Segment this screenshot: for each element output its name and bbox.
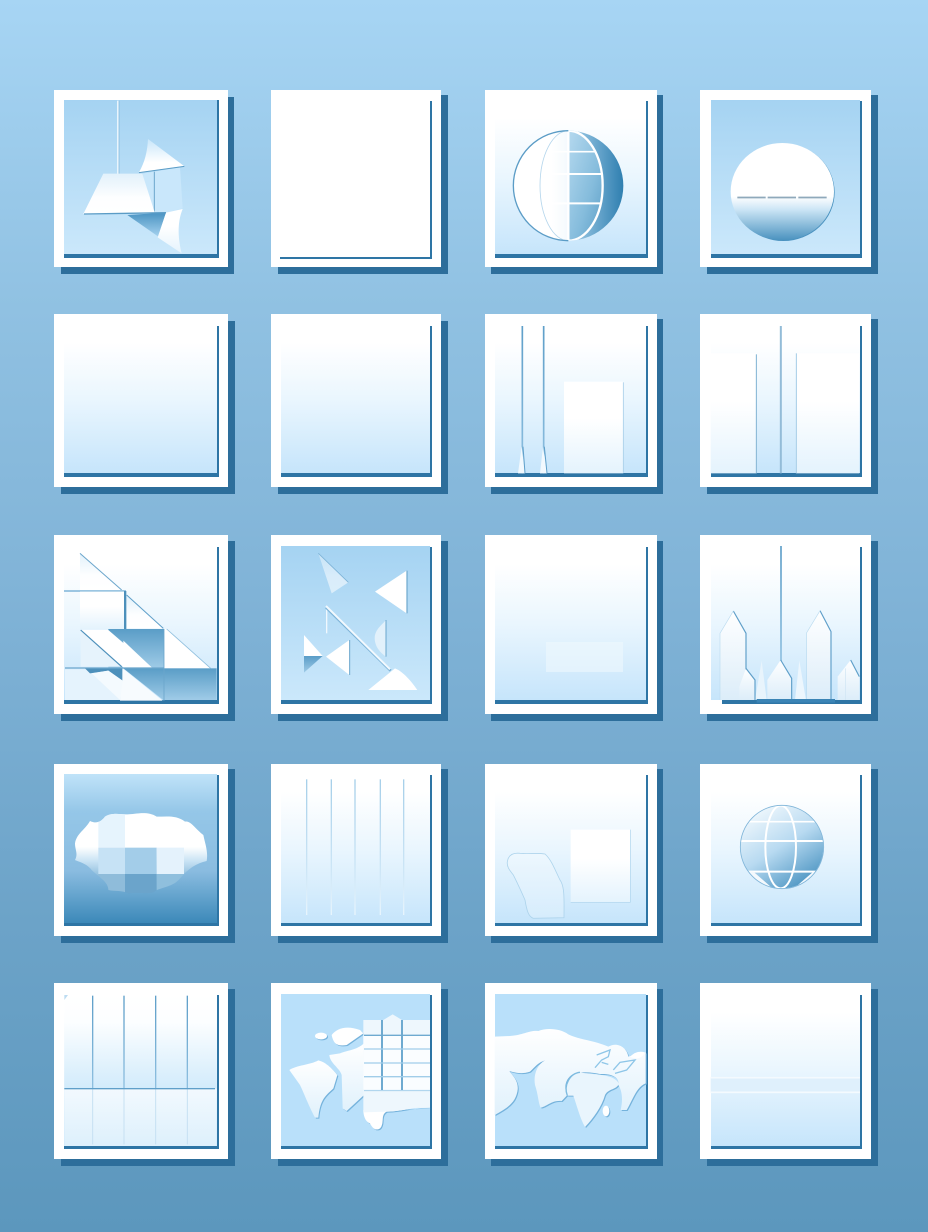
panel: row 2 card 2, blank xyxy=(271,314,448,494)
panel: row 1 card 1, hanging shapes xyxy=(54,90,234,274)
icon: map continents xyxy=(289,1028,430,1129)
panel: row 3 card 4, pointed towers xyxy=(700,535,878,721)
icon: horizontal band with white rules xyxy=(711,1078,860,1093)
icon: globe with crescent shadow xyxy=(513,130,623,241)
panel: row 5 card 4, horizontal band xyxy=(700,983,878,1166)
panel: row 4 card 4, small globe xyxy=(700,764,878,943)
panel: row 4 card 3, blob and rectangle xyxy=(485,764,663,943)
icon: five vertical lines xyxy=(306,779,404,915)
panel: row 3 card 1, stepped triangles xyxy=(54,535,235,721)
icon: sphere with dashed line xyxy=(731,143,835,241)
icon: cloud-shaped patchwork xyxy=(75,812,207,894)
panel: row 2 card 1, blank xyxy=(54,314,235,494)
panel: row 3 card 2, scattered triangles xyxy=(271,535,448,721)
icon: scattered triangles and diagonal xyxy=(304,553,417,690)
panel: row 5 card 3, world map xyxy=(485,983,663,1166)
panel: row 1 card 3, shaded globe xyxy=(485,90,663,274)
icon: map grid panel xyxy=(363,1014,430,1112)
icon: spires and white rectangle xyxy=(518,326,623,473)
icon: small globe xyxy=(740,805,824,889)
panel: row 4 card 1, cloud map xyxy=(54,764,235,943)
panel: row 5 card 1, grid lines xyxy=(54,983,235,1166)
icon: map landmass xyxy=(495,1029,646,1127)
icon: faint rectangle xyxy=(546,642,623,672)
panel: row 3 card 3, faint rectangle xyxy=(485,535,663,721)
panel: row 1 card 2, blank xyxy=(271,90,448,274)
icon: stepped triangles xyxy=(64,553,217,701)
icon: vertical lines crossing a horizontal line xyxy=(64,994,217,1146)
icon: outlined blob and white rectangle xyxy=(507,830,630,918)
panel: row 1 card 4, sphere xyxy=(700,90,878,274)
panel: row 2 card 4, tall columns xyxy=(700,314,878,494)
panel: row 5 card 2, world map with grid xyxy=(271,983,448,1166)
panel: row 2 card 3, spires and rectangle xyxy=(485,314,663,494)
panel: row 4 card 2, thin vertical lines xyxy=(271,764,448,943)
icon: hanging sail shapes xyxy=(83,101,184,253)
icon: pointed towers and mast xyxy=(720,546,859,703)
icon: columns with divider lines xyxy=(711,326,859,473)
